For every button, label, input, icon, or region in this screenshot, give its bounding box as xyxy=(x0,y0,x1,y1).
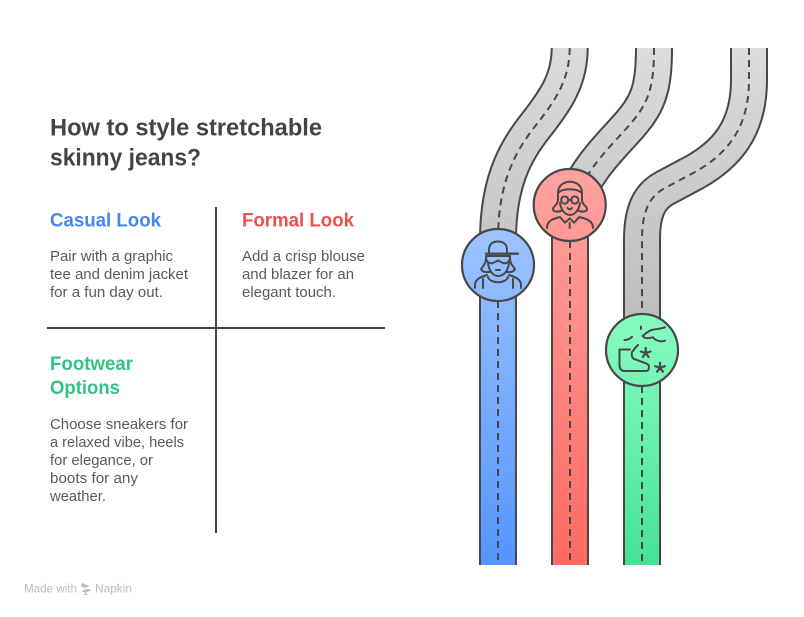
quadrant divider lines xyxy=(47,207,385,533)
icon: footwear boot and stars xyxy=(606,314,678,386)
text: casual look description: tee and denim jacket xyxy=(50,267,188,283)
panel: casual look xyxy=(50,210,188,301)
heading: casual look: Casual Look xyxy=(50,210,161,232)
heading: footwear options: Footwear xyxy=(50,354,134,375)
text: formal look description: elegant touch. xyxy=(242,285,336,301)
text: formal look description: and blazer for an xyxy=(242,267,354,283)
panel: formal look xyxy=(242,210,365,301)
text: footwear description: boots for any xyxy=(50,471,139,487)
road: casual (blue) xyxy=(498,48,570,565)
footer: made with napkin: Napkin xyxy=(95,584,132,596)
icon: formal look woman with glasses xyxy=(534,169,606,241)
footer: made with napkin xyxy=(24,583,132,596)
text: footwear description: Choose sneakers for xyxy=(50,417,188,433)
text: footwear description: a relaxed vibe, heels xyxy=(50,435,184,451)
heading: footwear options: Options xyxy=(50,378,120,399)
text: formal look description xyxy=(242,249,365,301)
road: footwear (green) xyxy=(642,48,749,565)
text: footwear description: for elegance, or xyxy=(50,453,153,469)
icon: casual look woman with cap xyxy=(462,229,534,301)
title: How to style stretchable xyxy=(50,114,322,142)
heading: formal look: Formal Look xyxy=(242,210,354,232)
text: formal look description: Add a crisp blouse xyxy=(242,249,365,265)
heading: footwear options xyxy=(50,354,134,399)
icon: napkin logo xyxy=(81,583,92,595)
title xyxy=(50,114,322,172)
text: footwear description xyxy=(49,417,188,505)
panel: footwear options xyxy=(49,354,188,505)
text: casual look description: for a fun day out. xyxy=(50,285,163,301)
text: footwear description: weather. xyxy=(49,489,106,505)
title: skinny jeans? xyxy=(50,144,201,172)
road: formal (red) xyxy=(570,48,654,565)
text: casual look description: Pair with a graphic xyxy=(50,249,173,265)
text: casual look description xyxy=(50,249,188,301)
footer: made with napkin: Made with xyxy=(24,584,77,596)
